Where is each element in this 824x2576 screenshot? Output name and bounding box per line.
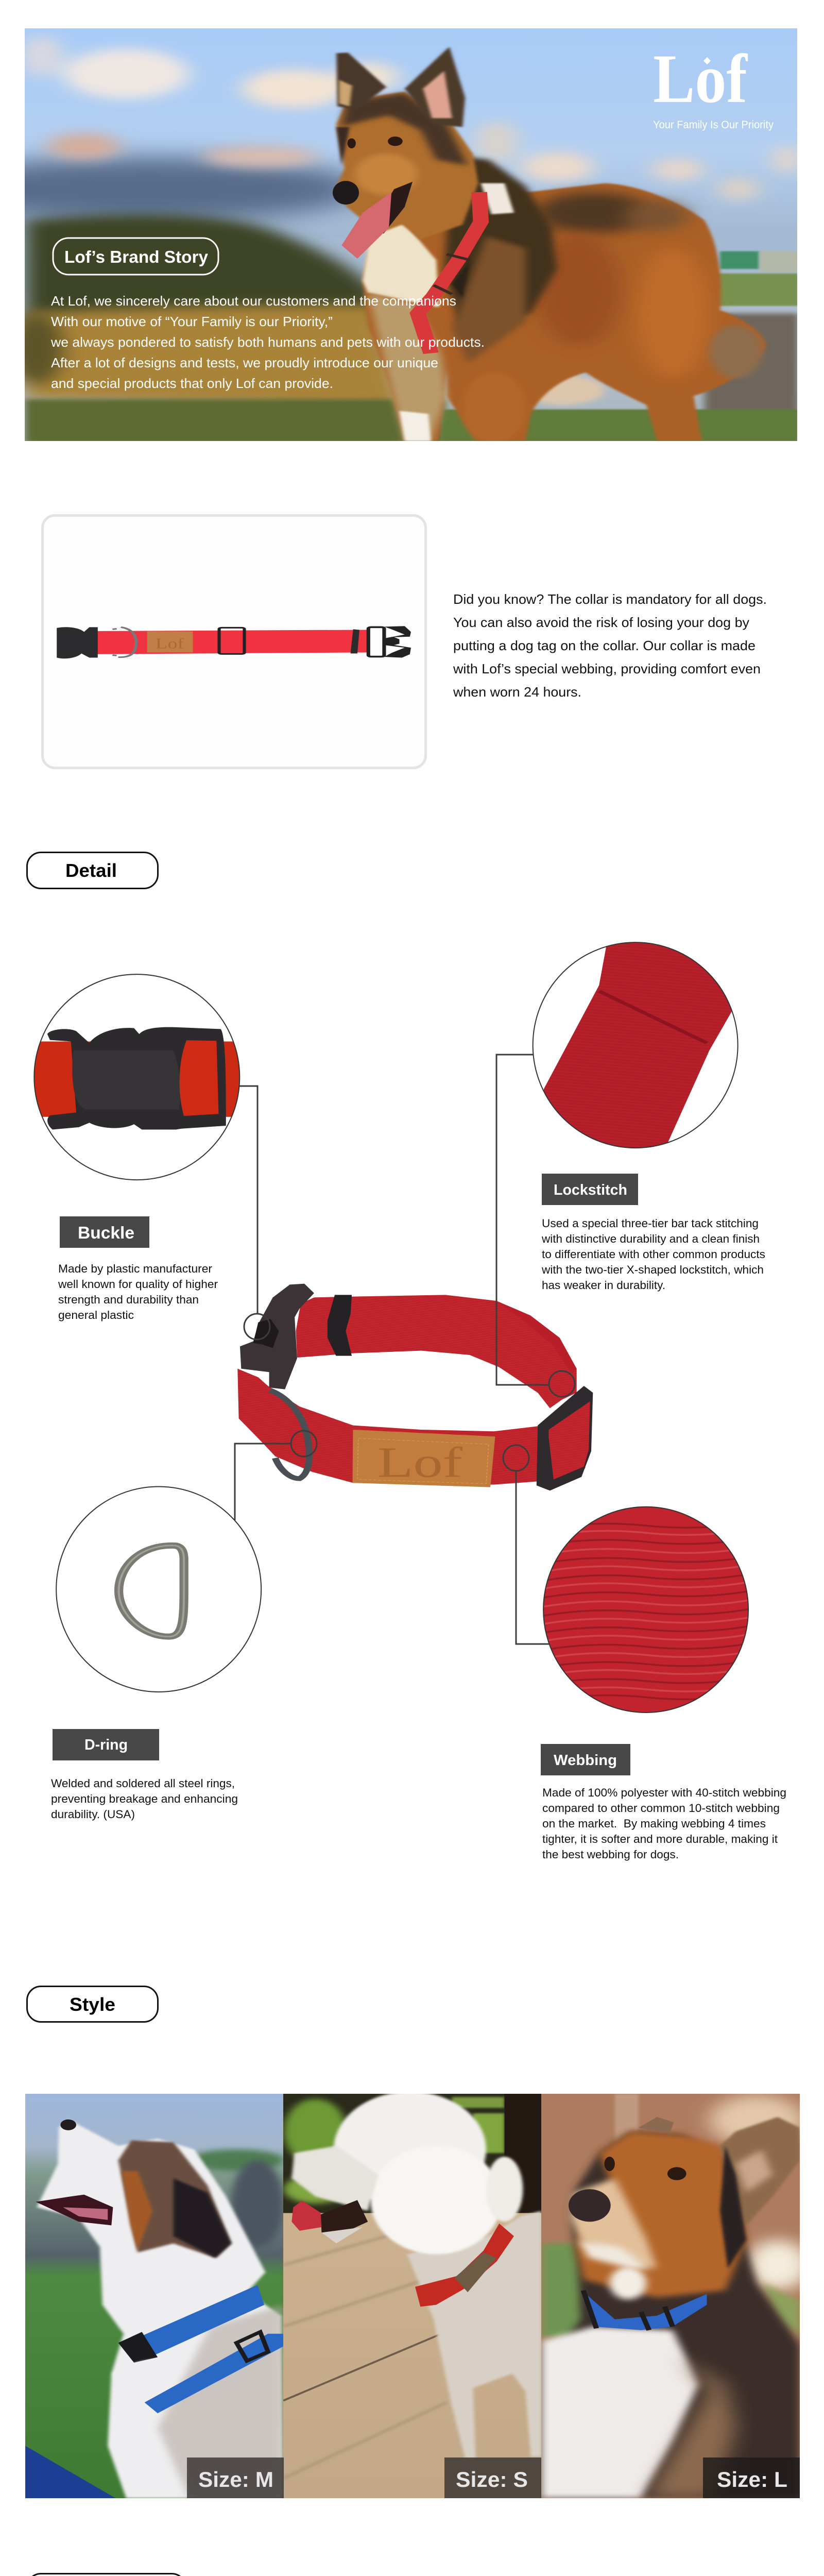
brand story text: With our motive of “Your Family is our Priority,” [51, 314, 333, 329]
text: did you know: You can also avoid the risk of losing your dog by [453, 615, 749, 630]
text: Webbing description: the best webbing for dogs. [542, 1848, 679, 1861]
text: Webbing description: compared to other common 10-stitch webbing [542, 1802, 780, 1815]
size badge: S: Size: S [456, 2467, 528, 2492]
label: D-ring: D-ring [84, 1737, 128, 1753]
heading pill: Lof's Brand Story [53, 238, 218, 275]
text: Webbing description: tighter, it is softer and more durable, making it [542, 1833, 778, 1845]
head [334, 92, 478, 240]
text: Webbing description: on the market. By making webbing 4 times [542, 1817, 766, 1830]
heading pill: Style: Style [70, 1994, 115, 2015]
collar on dog [418, 192, 481, 353]
size badge: L [703, 2458, 800, 2498]
detail circle: webbing [541, 1507, 751, 1713]
dog mane [439, 154, 557, 334]
heading pill: Detail: Detail [65, 860, 117, 881]
red collar [415, 2224, 514, 2307]
text: Lockstitch description: to differentiate with other common products [542, 1248, 765, 1261]
size badge: L: Size: L [717, 2467, 787, 2492]
buckle [240, 1284, 314, 1389]
panel: hero brand story [0, 28, 799, 444]
brand story text: At Lof, we sincerely care about our customers and the companions [51, 293, 456, 309]
heading pill: Lof's Brand Story: Lof’s Brand Story [64, 247, 209, 266]
keeper [328, 1295, 352, 1356]
dog body [363, 177, 766, 441]
main collar image [237, 1284, 593, 1490]
heading pill: How to put on [27, 2574, 185, 2576]
text: Lockstitch description: Used a special three-tier bar tack stitching [542, 1217, 759, 1230]
text: Buckle description: Made by plastic manufacturer [58, 1262, 212, 1275]
size badge: S [444, 2458, 541, 2498]
photo: size M dog [25, 2094, 283, 2498]
text: did you know: putting a dog tag on the collar. Our collar is made [453, 638, 756, 653]
chest [363, 217, 439, 308]
label: Webbing [541, 1744, 630, 1775]
logo: Lof [653, 41, 748, 117]
photo: collie dog in a field [25, 28, 797, 441]
heading pill: Detail [27, 852, 158, 888]
text: did you know: Did you know? The collar is mandatory for all dogs. [453, 591, 767, 607]
text: D-ring description: preventing breakage and enhancing [51, 1792, 238, 1805]
text: D-ring description: Welded and soldered all steel rings, [51, 1777, 235, 1790]
brand story text [50, 293, 485, 391]
detail circle: buckle [34, 974, 239, 1180]
text: Buckle description: strength and durability than [58, 1293, 199, 1306]
text: Lockstitch description: with distinctive durability and a clean finish [541, 1232, 760, 1245]
label: Lockstitch: Lockstitch [554, 1182, 627, 1198]
brand story text: we always pondered to satisfy both humans and pets with our products. [50, 334, 485, 350]
callout lines and markers [235, 1055, 575, 1644]
text: Buckle description: well known for quality of higher [58, 1278, 218, 1291]
panel: product card [42, 515, 425, 768]
product collar image: Lof [156, 635, 184, 652]
photo: size L dog [541, 2094, 800, 2498]
text: Lockstitch description [541, 1217, 765, 1292]
heading pill: Style [27, 1987, 158, 2022]
size badge: M [187, 2458, 284, 2498]
leather tag [352, 1430, 495, 1487]
text: D-ring description [51, 1777, 238, 1821]
text: Buckle description: general plastic [58, 1309, 134, 1321]
text: Lockstitch description: has weaker in durability. [542, 1279, 665, 1292]
D-ring [270, 1390, 309, 1479]
text: Buckle description [58, 1262, 218, 1321]
back strap [296, 1295, 577, 1408]
white poodle [407, 2211, 541, 2459]
text: did you know [453, 591, 767, 700]
label: Lockstitch [542, 1174, 638, 1205]
text: did you know: with Lof’s special webbing, providing comfort even [453, 661, 761, 676]
detail circle: lockstitch [533, 939, 741, 1149]
logo tagline: Your Family Is Our Priority [653, 119, 774, 131]
text: Webbing description: Made of 100% polyester with 40-stitch webbing [542, 1786, 786, 1799]
blue collar [586, 2294, 707, 2330]
slider [537, 1386, 593, 1490]
label: Buckle [60, 1216, 149, 1248]
text: Webbing description [542, 1786, 786, 1861]
text: did you know: when worn 24 hours. [453, 684, 581, 700]
dog [541, 2131, 800, 2498]
product collar image [57, 626, 411, 658]
label: Webbing: Webbing [554, 1752, 617, 1769]
text: D-ring description: durability. (USA) [51, 1808, 135, 1821]
brand story text: and special products that only Lof can provide. [51, 376, 333, 391]
photo: size S dog [283, 2094, 541, 2498]
label: Buckle: Buckle [78, 1223, 134, 1242]
size badge: M: Size: M [198, 2467, 273, 2492]
text: Lockstitch description: with the two-tier X-shaped lockstitch, which [541, 1263, 764, 1276]
main collar image: Lof [377, 1439, 463, 1486]
label: D-ring [53, 1729, 159, 1760]
detail circle: D-ring [56, 1487, 261, 1692]
brand story text: After a lot of designs and tests, we proudly introduce our unique [51, 355, 438, 370]
front strap [237, 1369, 589, 1485]
